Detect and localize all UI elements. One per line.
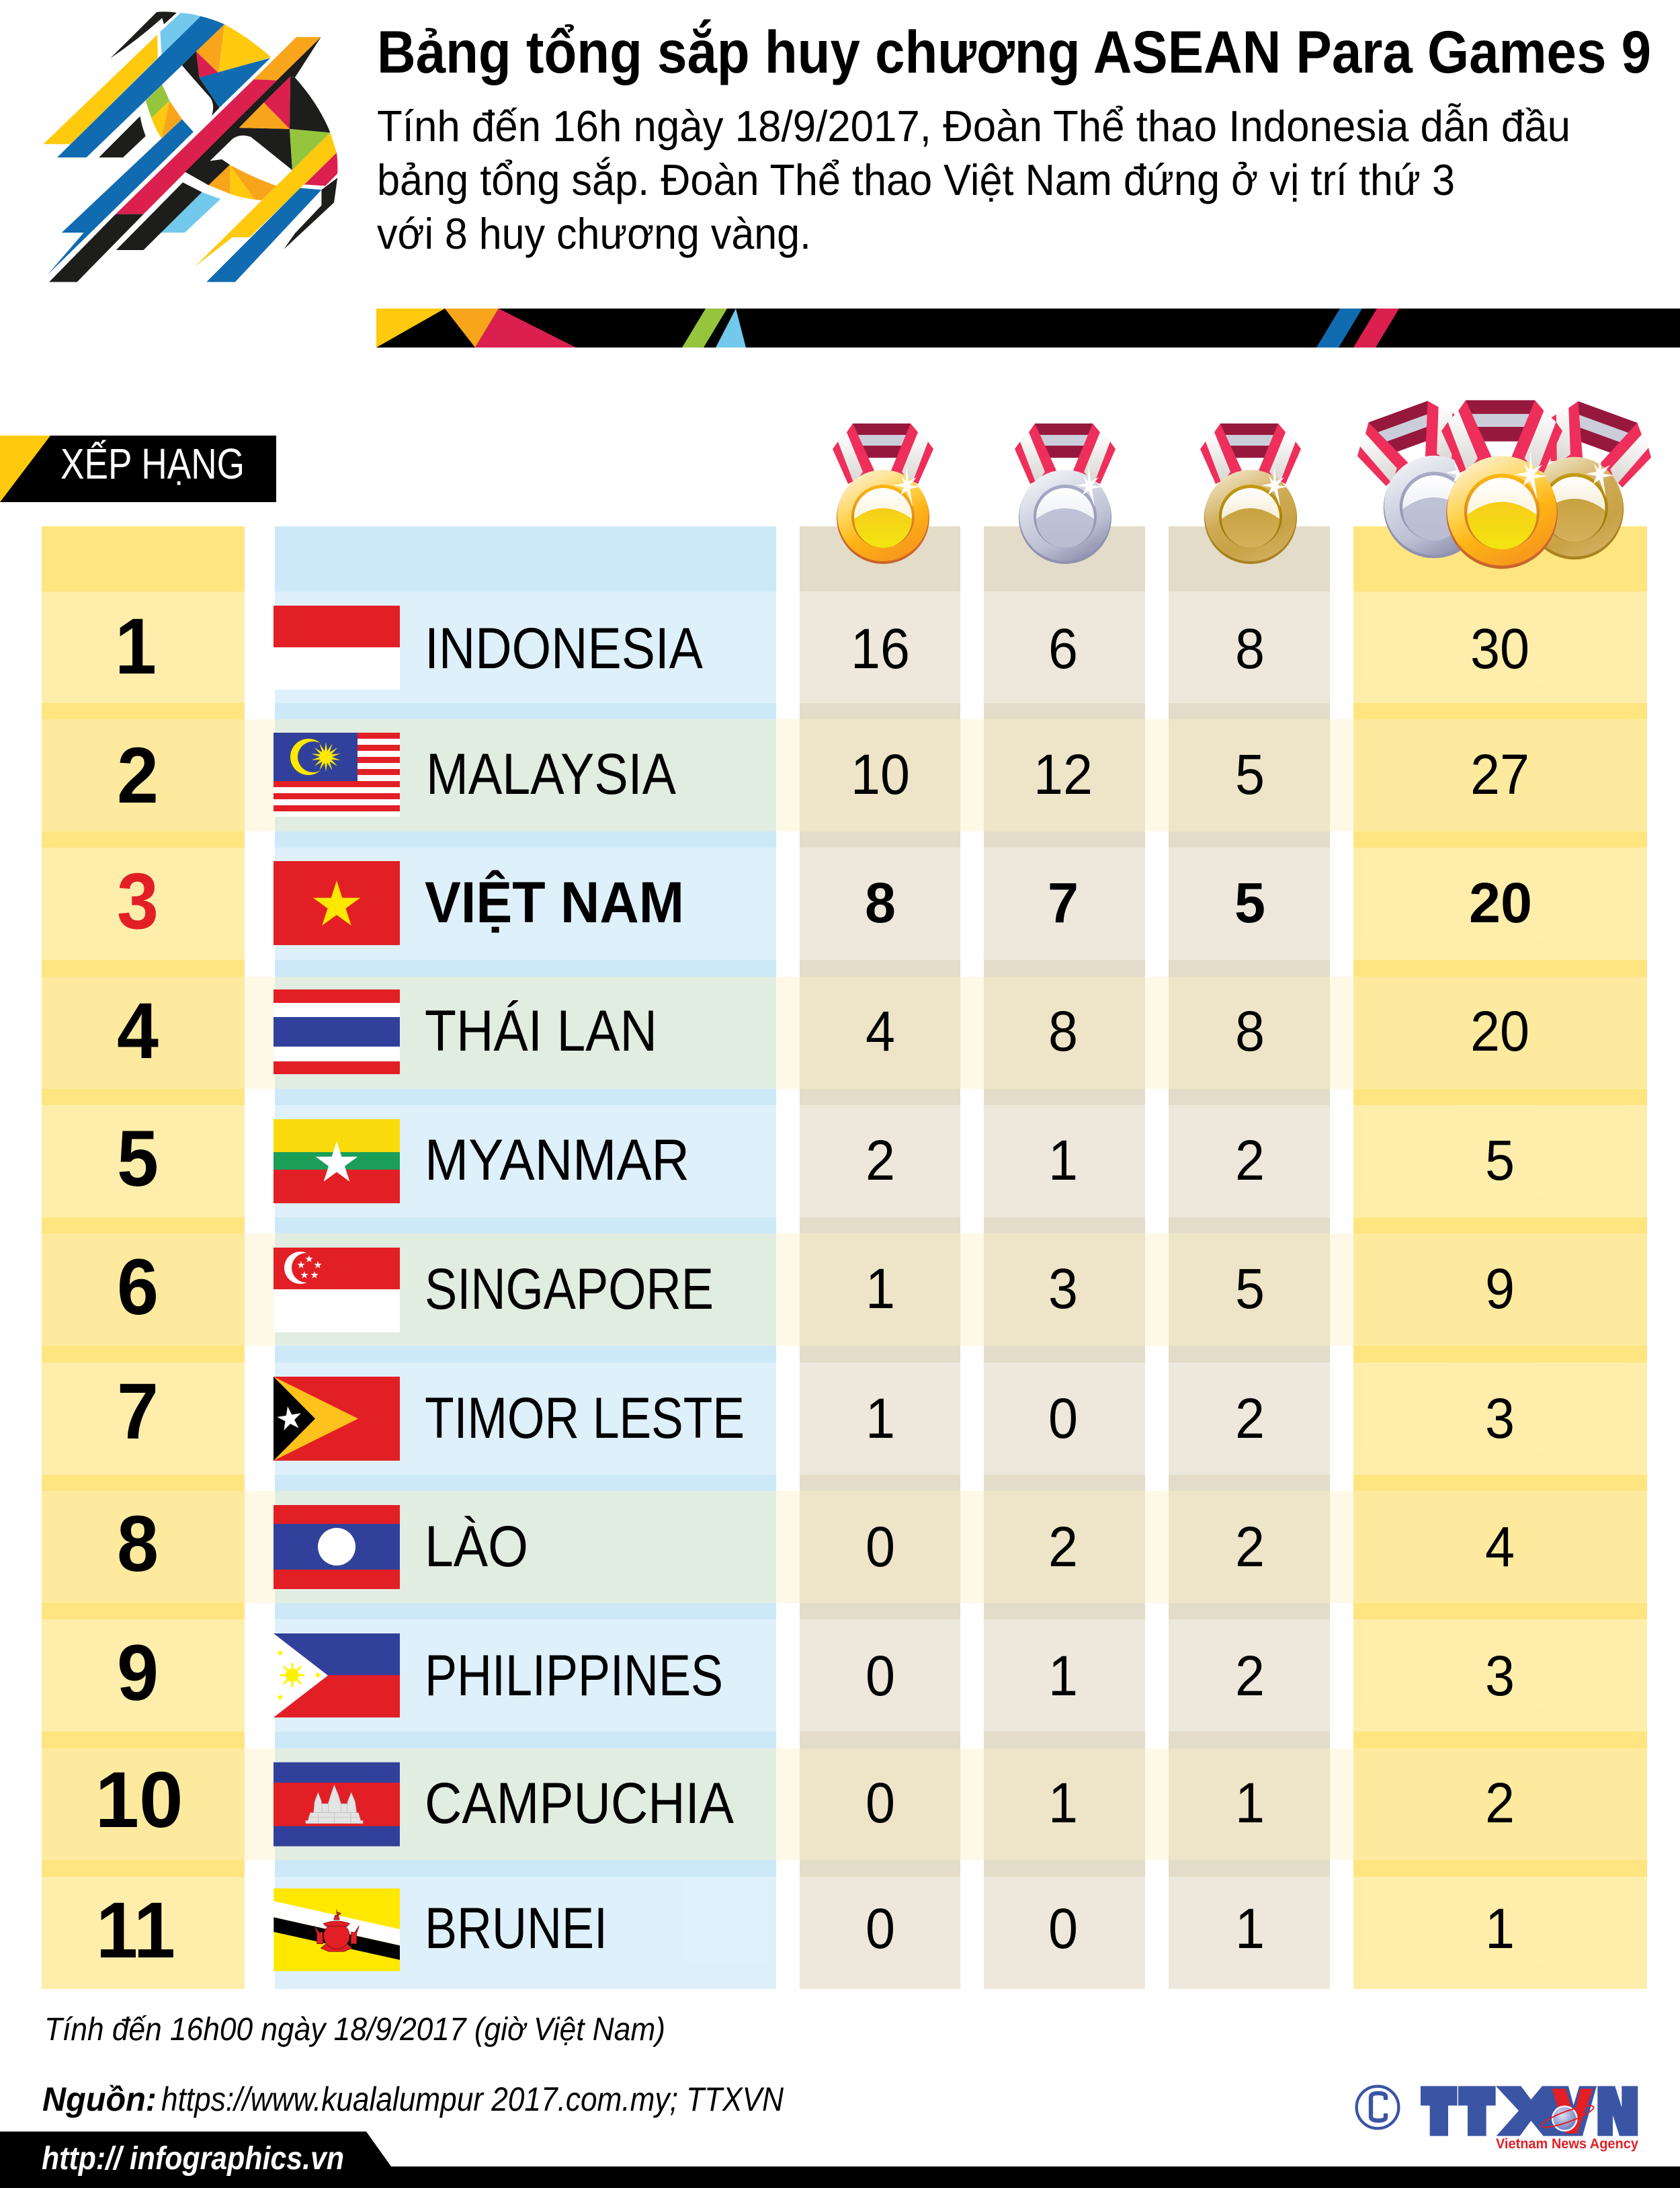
row 9: Philippines: 1 [1048,1644,1078,1707]
source line: Nguồn: [42,2080,157,2118]
row 8: Lào: 4 [1485,1515,1515,1578]
panel: bronze column [1169,526,1330,1989]
row 7: Timor Leste: 7 [117,1367,159,1456]
intro text: bảng tổng sắp. Đoàn Thể thao Việt Nam đứng ở vị trí thứ 3 [377,155,1455,204]
row 3: Việt Nam: 8 [865,871,896,934]
row 10: Campuchia: 2 [1485,1771,1515,1834]
row 5: Myanmar: 5 [1485,1129,1515,1192]
note: time stamp: Tính đến 16h00 ngày 18/9/2017 (giờ Việt Nam) [44,2012,665,2048]
row 10: Campuchia: 1 [1048,1771,1078,1834]
flag: Philippines [274,1633,400,1717]
flag: Timor Leste [274,1377,400,1461]
row 7: Timor Leste: 2 [1235,1387,1265,1450]
intro text: Tính đến 16h ngày 18/9/2017, Đoàn Thể thao Indonesia dẫn đầu [377,102,1570,151]
flag: Indonesia [274,606,400,690]
row 6: Singapore: 3 [1048,1257,1078,1320]
row 1: Indonesia: 1 [115,602,157,691]
icon: bronze medal [1200,423,1301,564]
flag: Việt Nam [274,861,400,945]
row 4: Thái Lan: 8 [1235,1000,1265,1063]
flag: Malaysia [274,733,400,817]
icon: silver medal [1015,423,1116,564]
row 7: Timor Leste: 1 [866,1387,895,1450]
row 2: Malaysia: 12 [1034,743,1093,806]
row 7: Timor Leste: 3 [1485,1387,1515,1450]
row 9: Philippines: PHILIPPINES [425,1644,723,1708]
row 3: Việt Nam: 20 [1469,871,1532,934]
row 2: Malaysia [117,731,1529,820]
panel: silver column [984,526,1145,1989]
row 11: Brunei: 1 [1485,1897,1515,1960]
row 7: Timor Leste: 0 [1048,1387,1078,1450]
row 1: Indonesia: 30 [1470,617,1529,680]
row 8: Lào: 8 [117,1500,159,1588]
row 8: Lào: 2 [1235,1515,1265,1578]
row 9: Philippines: 0 [866,1644,895,1707]
row 4: Thái Lan: 4 [117,987,159,1076]
row 2: Malaysia: 5 [1235,743,1265,806]
row 5: Myanmar: 1 [1048,1129,1078,1192]
row 8: Lào: 0 [866,1515,895,1578]
icon: gold medal [833,423,933,564]
footer bar: http:// infographics.vn [42,2141,344,2177]
intro text [377,102,1570,258]
row 9: Philippines: 9 [117,1629,159,1717]
row 3: Việt Nam: 3 [117,857,159,946]
row 3: Việt Nam: VIỆT NAM [425,870,684,935]
row 11: Brunei: BRUNEI [425,1896,607,1961]
logo: TTXVN Vietnam News Agency: Vietnam News Agency [1496,2136,1638,2152]
row 2: Malaysia: 27 [1470,743,1529,806]
row 10: Campuchia: 1 [1235,1771,1265,1834]
row 3: Việt Nam: 7 [1048,871,1079,934]
header stripe [376,309,1680,348]
row 5: Myanmar: MYANMAR [425,1128,689,1192]
flag: Lào [274,1505,400,1589]
row 10: Campuchia: 10 [95,1756,183,1845]
row 6: Singapore: SINGAPORE [425,1257,714,1322]
row 1: Indonesia: 8 [1235,617,1265,680]
row 6: Singapore [117,1243,1515,1332]
row 1: Indonesia: 6 [1048,617,1078,680]
footer bar [0,2132,1680,2188]
row 2: Malaysia: MALAYSIA [426,742,677,807]
row 11: Brunei: 11 [96,1886,175,1975]
row 4: Thái Lan: 4 [866,1000,895,1063]
flag: Thái Lan [274,989,400,1074]
row 5: Myanmar: 2 [1235,1129,1265,1192]
icon: three medals [1348,393,1661,569]
source line: https://www.kualalumpur 2017.com.my; TTXVN [161,2080,784,2118]
row 6: Singapore: 5 [1235,1257,1265,1320]
row 8: Lào [117,1500,1515,1589]
row 5: Myanmar [117,1115,1515,1203]
row 5: Myanmar: 2 [866,1129,895,1192]
badge: XẾP HẠNG: XẾP HẠNG [60,440,245,488]
row 4: Thái Lan: 20 [1470,1000,1529,1063]
panel: total column [1353,526,1647,1989]
row 9: Philippines: 2 [1235,1644,1265,1707]
row 1: Indonesia [115,602,1529,691]
badge: XẾP HẠNG [0,436,276,502]
row 10: Campuchia: 0 [866,1771,895,1834]
row 11: Brunei: 0 [866,1897,895,1960]
row 11: Brunei [96,1886,1515,1975]
row 1: Indonesia: 16 [851,617,910,680]
row 7: Timor Leste [117,1367,1515,1461]
row 10: Campuchia: CAMPUCHIA [425,1771,734,1836]
panel: country column [275,526,776,1989]
row 9: Philippines [117,1629,1515,1717]
panel: rank column [42,526,245,1989]
row 4: Thái Lan: 8 [1048,1000,1078,1063]
panel: gold column [800,526,960,1989]
intro text: với 8 huy chương vàng. [377,209,811,258]
row 4: Thái Lan: THÁI LAN [425,999,657,1063]
row 11: Brunei: 1 [1235,1897,1265,1960]
flag: Myanmar [274,1119,400,1203]
row 11: Brunei: 0 [1048,1897,1078,1960]
row 8: Lào: 2 [1048,1515,1078,1578]
flag: Brunei [274,1888,400,1971]
row stripes [42,592,1647,1989]
row 5: Myanmar: 5 [117,1115,159,1203]
row 8: Lào: LÀO [425,1514,528,1579]
flag: Campuchia [274,1762,400,1847]
row 10: Campuchia [95,1756,1515,1847]
row 3: Việt Nam: 5 [1234,871,1265,934]
row 4: Thái Lan [117,987,1529,1076]
row 7: Timor Leste: TIMOR LESTE [425,1386,745,1451]
row 2: Malaysia: 2 [117,731,159,820]
logo: TTXVN Vietnam News Agency [1357,2086,1638,2152]
row 9: Philippines: 3 [1485,1644,1515,1707]
row 6: Singapore: 6 [117,1243,159,1332]
row 6: Singapore: 9 [1485,1257,1515,1320]
flag: Singapore [274,1248,400,1332]
row 6: Singapore: 1 [866,1257,895,1320]
row 1: Indonesia: INDONESIA [425,616,704,681]
row 3: Việt Nam [117,857,1532,946]
logo: ASEAN Para Games 9 emblem [43,11,337,282]
row 2: Malaysia: 10 [851,743,910,806]
